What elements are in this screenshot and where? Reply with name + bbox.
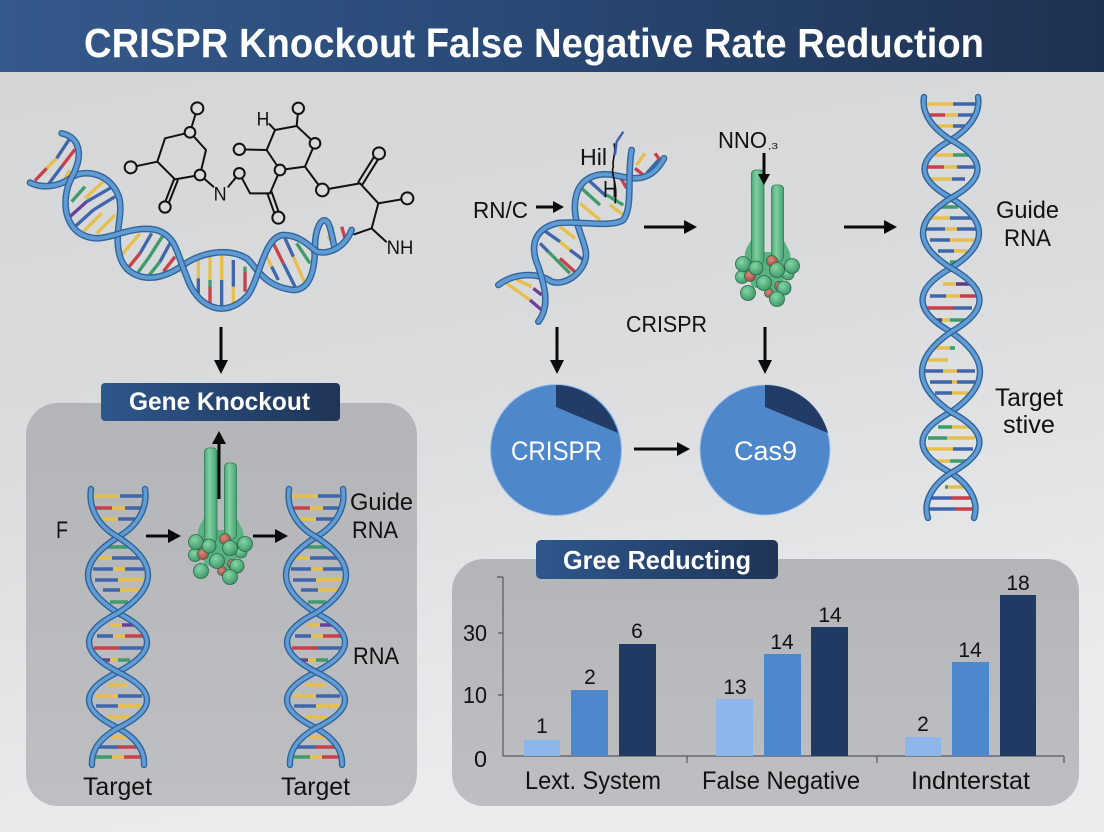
illustration: curved DNA strand [30, 133, 352, 309]
title: CRISPR Knockout False Negative Rate Reduction [84, 20, 984, 66]
bars: False Negative: 13 [723, 676, 747, 699]
bars: Indnterstat [905, 572, 1036, 756]
heading pill: reduction [536, 540, 778, 579]
heading pill: reduction: Gree Reducting [563, 545, 751, 575]
label: RNA: RNA [353, 643, 400, 670]
y axis labels [463, 620, 487, 772]
panel: bar chart [452, 540, 1079, 806]
arrow: NNO to protein [758, 153, 770, 185]
arrow: DNA to protein [644, 220, 697, 234]
tall DNA helix: right [922, 97, 980, 518]
category labels [525, 767, 1030, 795]
pie chart: CRISPR: CRISPR [511, 436, 602, 466]
pie chart: Cas9 [700, 385, 830, 515]
bars: Indnterstat: 14 [958, 639, 982, 662]
arrow: protein to right helix [844, 220, 897, 234]
illustration: molecule structure: NH [387, 238, 413, 259]
label: guide RNA right: Guide [996, 197, 1059, 224]
bars: Indnterstat: 2 [917, 713, 929, 736]
label: guide RNA: RNA [352, 517, 399, 544]
y axis labels: 30 [463, 620, 487, 646]
bars: Lext. System: 1 [536, 715, 548, 738]
illustration: central DNA strand [498, 132, 664, 322]
arrow: up [212, 431, 226, 499]
pie chart: CRISPR [490, 384, 622, 516]
bars: Lext. System: 6 [631, 620, 643, 643]
arrow: RN/C to DNA [536, 201, 564, 213]
label: Hil: Hil [580, 144, 607, 170]
label: target stive: stive [1003, 411, 1055, 439]
label: guide RNA [350, 489, 413, 544]
bars: False Negative: 14 [770, 631, 794, 654]
y axis labels: 10 [463, 682, 487, 708]
label: target stive: Target [995, 384, 1063, 412]
label: NNO: ,3 [768, 142, 779, 151]
bars: False Negative [716, 604, 848, 756]
arrow: protein to helix [253, 529, 288, 543]
arrow: pie to pie [634, 442, 690, 456]
bars: False Negative: 14 [818, 604, 842, 627]
arrow: DNA to pie [550, 327, 564, 374]
label: target left: Target [83, 773, 152, 801]
bars: Lext. System [524, 620, 656, 756]
heading pill: gene knockout: Gene Knockout [129, 388, 311, 416]
protein icon: top [736, 170, 800, 306]
label: CRISPR: CRISPR [626, 311, 707, 337]
label: guide RNA: Guide [350, 489, 413, 516]
label: target right: Target [281, 773, 350, 801]
chart axes [497, 577, 1064, 763]
pie chart: Cas9: Cas9 [734, 436, 797, 466]
category labels: Indnterstat [911, 767, 1030, 795]
bars: Indnterstat: 18 [1006, 572, 1030, 595]
header banner [0, 0, 1104, 72]
illustration: molecule structure [125, 102, 413, 259]
Cas9 protein icon [188, 448, 252, 584]
left DNA helix [88, 489, 148, 765]
label: F: F [56, 517, 68, 544]
bars: Lext. System: 2 [584, 666, 596, 689]
right DNA helix [286, 489, 346, 765]
arrow: molecule to gene knockout [214, 327, 228, 374]
label: target stive [995, 384, 1063, 439]
y axis labels: 0 [474, 746, 487, 772]
label: NNO: NNO [718, 127, 767, 153]
arrow: helix to protein [146, 529, 181, 543]
category labels: Lext. System [525, 767, 661, 795]
category labels: False Negative [702, 767, 860, 795]
label: RN/C: RN/C [473, 197, 528, 223]
illustration: molecule structure: N [214, 185, 227, 206]
heading pill: gene knockout [101, 383, 340, 421]
label: guide RNA right [996, 197, 1059, 252]
illustration: molecule structure: H [257, 109, 269, 130]
panel: gene knockout [26, 383, 417, 806]
arrow: protein to pie [758, 327, 772, 374]
label: guide RNA right: RNA [1004, 225, 1052, 252]
label: H: H [603, 176, 617, 202]
